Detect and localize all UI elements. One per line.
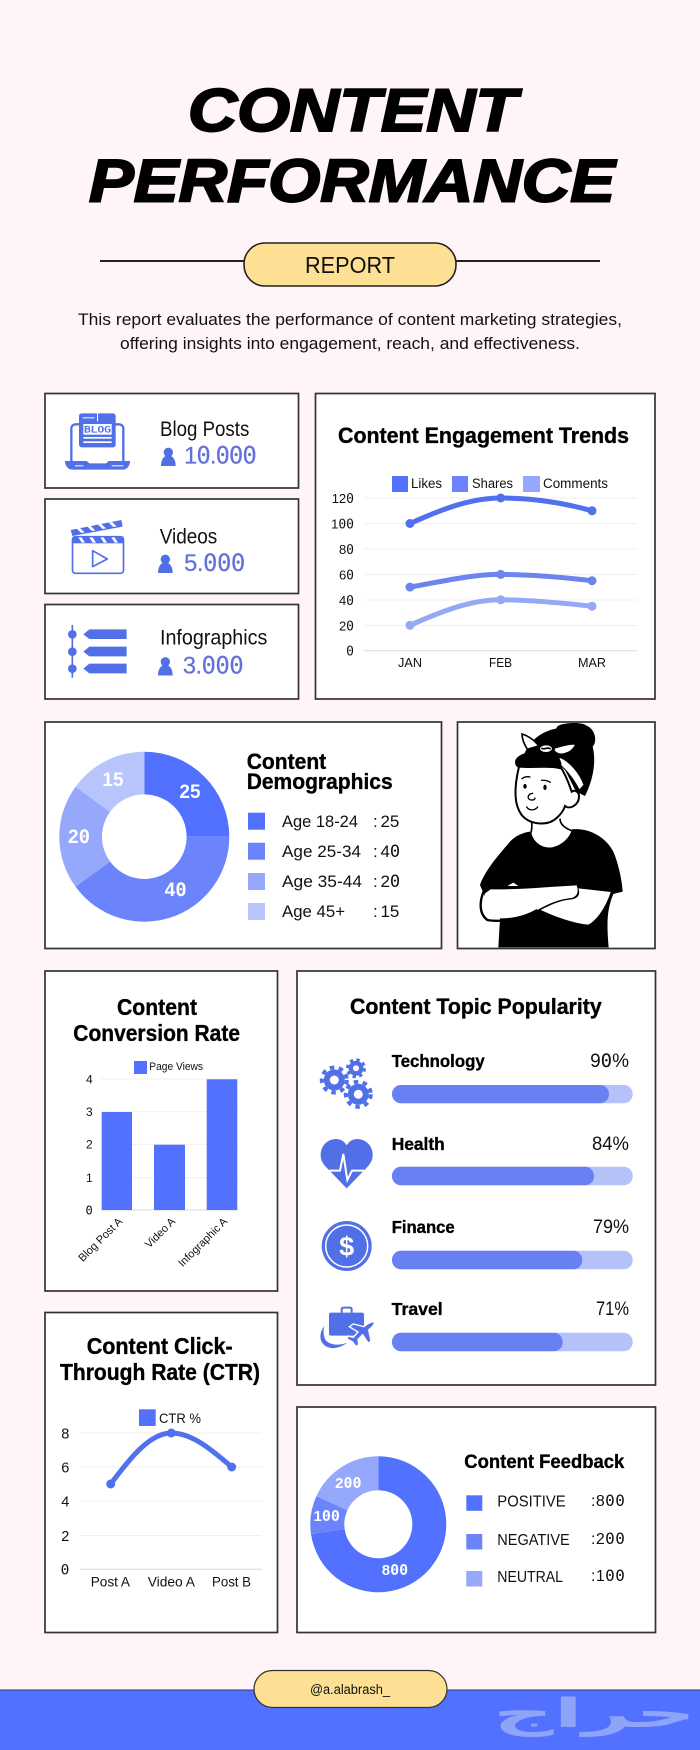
bar chart: Video A — [143, 1215, 179, 1251]
panel: content feedback — [297, 1407, 656, 1632]
progress bar — [392, 1167, 633, 1185]
heading: Content Topic Popularity — [350, 994, 602, 1019]
legend: Age 25-34 — [282, 842, 361, 861]
value: infographics: 3.000 — [183, 651, 243, 679]
heading — [247, 749, 393, 794]
heading: Content Click- — [87, 1333, 233, 1359]
bar chart: 0 — [85, 1204, 93, 1218]
icon: suitcase and plane — [320, 1308, 374, 1348]
icon: blog laptop: BLOG — [84, 426, 111, 436]
panel: content demographics — [45, 722, 442, 948]
donut chart: 15 — [102, 770, 124, 791]
intro text: This report evaluates the performance of content marketing strategies, — [78, 311, 622, 329]
line chart: Post A — [91, 1574, 131, 1590]
icon: list timeline — [68, 625, 127, 678]
line chart: 40 — [339, 593, 354, 609]
label: Finance — [392, 1217, 455, 1237]
row: technology — [322, 1050, 633, 1107]
icon: woman with crossed arms — [480, 723, 623, 947]
heading: Through Rate (CTR) — [60, 1359, 260, 1385]
legend: : 20 — [373, 872, 400, 892]
legend: : 25 — [373, 812, 399, 831]
title — [89, 77, 617, 214]
line chart: 4 — [61, 1494, 69, 1510]
bar chart: Infographic A — [176, 1215, 231, 1270]
line chart: JAN — [398, 655, 422, 670]
handle badge: @a.alabrash_ — [310, 1682, 390, 1697]
line chart: 20 — [339, 618, 354, 634]
legend: :800 — [591, 1491, 625, 1510]
label: blog posts: Blog Posts — [160, 418, 249, 441]
icon: heart — [321, 1139, 373, 1188]
panel: content conversion rate — [45, 971, 278, 1291]
shirt — [480, 829, 623, 947]
neck — [531, 819, 572, 833]
legend: NEUTRAL — [497, 1569, 563, 1586]
legend — [134, 1061, 203, 1074]
value: 84% — [592, 1134, 629, 1155]
legend: Age 45+ — [282, 902, 345, 921]
icon: blog laptop — [65, 413, 130, 470]
line chart: 100 — [331, 516, 354, 532]
icon: person — [158, 657, 173, 675]
legend: Age 18-24 — [282, 812, 358, 831]
progress bar — [392, 1251, 633, 1269]
legend: :200 — [591, 1529, 625, 1548]
line chart: MAR — [578, 655, 606, 670]
panel: character illustration — [458, 722, 655, 948]
label: Travel — [392, 1299, 443, 1319]
legend: :100 — [591, 1566, 625, 1585]
heading: Conversion Rate — [73, 1020, 240, 1046]
icon: dollar coin — [322, 1221, 372, 1271]
progress bar — [392, 1333, 633, 1351]
legend: : 40 — [373, 842, 400, 862]
legend: Shares — [472, 476, 513, 491]
label: Technology — [392, 1051, 485, 1071]
handle badge — [254, 1670, 447, 1708]
face — [515, 765, 579, 823]
heading: Content — [117, 994, 197, 1020]
legend — [248, 812, 400, 921]
hair and bun — [523, 723, 595, 796]
bar chart: 3 — [86, 1105, 93, 1119]
facial features — [523, 784, 527, 789]
legend: Comments — [543, 476, 608, 491]
bar chart — [76, 1072, 238, 1270]
value: videos: 5.000 — [184, 549, 245, 577]
legend: POSITIVE — [497, 1494, 566, 1511]
headband — [558, 757, 584, 790]
bar chart: 1 — [86, 1171, 93, 1185]
title: CONTENT — [188, 77, 522, 144]
heading: Content — [247, 749, 327, 774]
panel: infographics — [45, 604, 298, 699]
heading: Demographics — [247, 769, 393, 794]
intro text — [78, 311, 622, 353]
icon: person — [161, 448, 176, 466]
bar chart: 4 — [86, 1072, 93, 1086]
heading: Content Feedback — [464, 1451, 624, 1473]
icon: gears — [322, 1060, 371, 1107]
donut chart: 100 — [313, 1507, 340, 1525]
footer band — [0, 1690, 700, 1750]
report badge with rule — [100, 243, 600, 286]
line chart: Video A — [148, 1574, 196, 1590]
line chart: 80 — [339, 542, 354, 558]
intro text: offering insights into engagement, reach, and effectiveness. — [120, 335, 580, 353]
bow — [522, 734, 539, 749]
bangs — [515, 750, 561, 769]
value: 79% — [593, 1217, 629, 1238]
donut chart — [310, 1456, 446, 1592]
line chart: 6 — [61, 1460, 69, 1476]
legend — [139, 1409, 201, 1426]
heading — [60, 1333, 260, 1385]
donut chart: 25 — [179, 782, 201, 803]
legend: Likes — [411, 476, 442, 491]
line chart: 0 — [346, 644, 354, 660]
line chart: 0 — [61, 1562, 69, 1578]
heading — [73, 994, 240, 1046]
donut chart: 200 — [335, 1474, 362, 1492]
value: 71% — [596, 1299, 629, 1320]
line chart: 60 — [339, 568, 354, 584]
watermark: حراج — [493, 1691, 696, 1737]
legend: : 15 — [373, 902, 399, 921]
panel: content engagement trends — [316, 394, 655, 699]
label: Health — [392, 1134, 445, 1154]
row: health — [321, 1134, 633, 1188]
legend: Age 35-44 — [282, 872, 362, 891]
donut chart: 800 — [382, 1561, 408, 1579]
value: blog posts: 10.000 — [184, 441, 256, 469]
line chart: FEB — [489, 655, 512, 670]
panel: content topic popularity — [297, 971, 656, 1385]
line chart — [331, 491, 637, 670]
panel: videos — [45, 499, 298, 594]
line chart: Post B — [212, 1574, 251, 1590]
bar chart: Blog Post A — [76, 1215, 126, 1264]
icon: clapperboard — [71, 520, 124, 573]
line chart — [61, 1426, 262, 1590]
legend: Page Views — [149, 1061, 203, 1073]
legend — [392, 476, 608, 492]
arms — [541, 888, 611, 925]
panel: content click-through rate — [45, 1312, 278, 1632]
legend: NEGATIVE — [497, 1532, 570, 1549]
panel: blog posts — [45, 394, 298, 488]
row: finance — [322, 1217, 633, 1271]
donut chart — [59, 752, 229, 922]
donut chart: 40 — [165, 879, 187, 901]
legend — [466, 1491, 625, 1586]
label: infographics: Infographics — [160, 626, 267, 649]
progress bar — [392, 1085, 633, 1103]
value: 90% — [590, 1050, 629, 1072]
title: PERFORMANCE — [89, 148, 617, 214]
heading: Content Engagement Trends — [338, 423, 629, 448]
icon: dollar coin: $ — [339, 1232, 354, 1262]
legend: CTR % — [159, 1410, 201, 1426]
line chart: 8 — [61, 1426, 69, 1442]
icon: person — [158, 555, 173, 573]
row: travel — [320, 1299, 633, 1351]
line chart: 2 — [61, 1529, 69, 1545]
line chart: 120 — [332, 491, 354, 507]
bar chart: 2 — [86, 1138, 93, 1152]
report badge with rule: REPORT — [305, 252, 395, 278]
label: videos: Videos — [160, 525, 217, 548]
donut chart: 20 — [68, 826, 90, 848]
